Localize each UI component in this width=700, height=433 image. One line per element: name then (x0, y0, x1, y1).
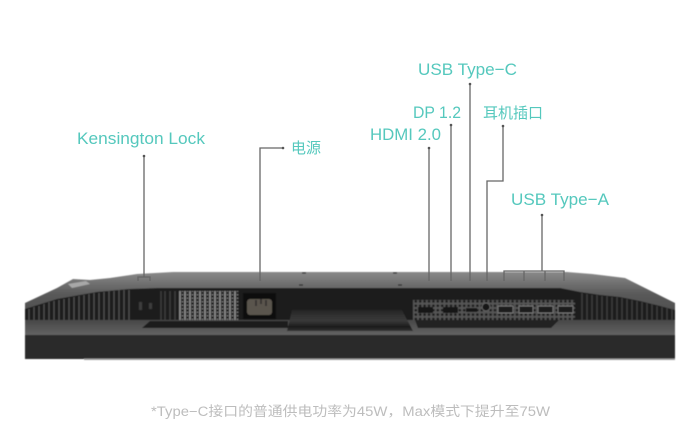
power socket (243, 293, 276, 319)
callout: USB Type-C: USB Type−C (418, 60, 517, 79)
port panel (413, 300, 575, 328)
lock slots (139, 302, 152, 310)
left vents (29, 290, 129, 320)
stand hinge (287, 310, 413, 331)
callout: DP 1.2: DP 1.2 (413, 103, 461, 122)
callout: USB Type-A (504, 190, 610, 281)
front bezel (25, 335, 675, 359)
footnote: *Type−C接口的普通供电功率为45W，Max模式下提升至75W (151, 403, 550, 419)
callout: Kensington Lock: Kensington Lock (77, 129, 206, 148)
surface screw marks (299, 273, 402, 285)
chin recess (142, 321, 288, 328)
callout: HDMI 2.0: HDMI 2.0 (370, 125, 441, 144)
monitor (25, 272, 675, 360)
center vents (161, 291, 175, 320)
callout: headphone jack: 耳机插口 (483, 105, 543, 122)
monitor top surface (25, 272, 675, 320)
callout: USB Type-A: USB Type−A (511, 190, 610, 209)
callout: power (260, 140, 321, 281)
bottom edge (84, 358, 675, 360)
right vents (582, 293, 672, 320)
callout: Kensington Lock (77, 129, 206, 281)
chin surface (25, 320, 675, 335)
callout: power: 电源 (291, 140, 321, 157)
connector recess (25, 288, 675, 321)
rating sticker (68, 281, 90, 288)
callout: headphone jack (483, 105, 543, 281)
